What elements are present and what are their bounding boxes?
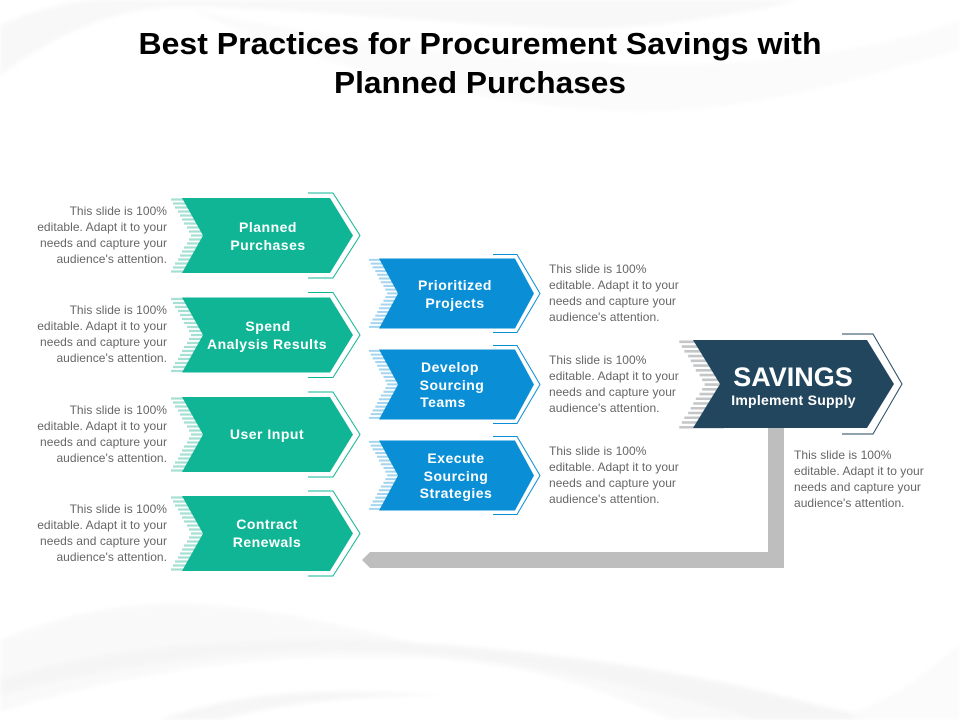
chevron: User Input: [171, 392, 360, 477]
chevron: Spend Analysis Results: [171, 292, 360, 378]
chevron: Execute Sourcing Strategies: [369, 436, 540, 514]
text block: middle 2: This slide is 100%: [549, 353, 647, 367]
chevron: Planned Purchases: Purchases: [230, 237, 306, 253]
text block: right: [794, 448, 924, 510]
chevron: Prioritized Projects: Projects: [425, 295, 485, 311]
chevron: Execute Sourcing Strategies: Strategies: [420, 485, 492, 501]
text block: left 1: [37, 204, 167, 266]
chevron: Develop Sourcing Teams: Sourcing: [420, 377, 484, 393]
title: Best Practices for Procurement Savings with: [138, 26, 822, 61]
arrow: feedback loop: [362, 428, 784, 568]
chevron: Spend Analysis Results: Analysis Results: [207, 336, 327, 352]
text block: left 4: [37, 502, 167, 564]
chevron: Savings Implement Supply: Implement Supply: [731, 392, 856, 408]
text block: middle 3: audience's attention.: [549, 492, 660, 506]
text block: right: needs and capture your: [794, 480, 921, 494]
text block: middle 2: editable. Adapt it to your: [549, 369, 679, 383]
chevron: Execute Sourcing Strategies: Sourcing: [424, 468, 488, 484]
text block: middle 1: audience's attention.: [549, 310, 660, 324]
chevron: Contract Renewals: Contract: [236, 516, 298, 532]
text block: left 2: [37, 303, 167, 365]
text block: left 1: editable. Adapt it to your: [37, 220, 167, 234]
chevron: Contract Renewals: Renewals: [233, 534, 301, 550]
text block: left 1: needs and capture your: [40, 236, 167, 250]
chevron: Develop Sourcing Teams: [369, 346, 540, 424]
text block: middle 3: [549, 444, 679, 506]
text block: left 2: This slide is 100%: [70, 303, 167, 317]
chevron: Contract Renewals: [171, 491, 360, 576]
text block: middle 3: editable. Adapt it to your: [549, 460, 679, 474]
text block: middle 2: audience's attention.: [549, 401, 660, 415]
chevron: Prioritized Projects: [369, 254, 540, 332]
text block: right: audience's attention.: [794, 496, 905, 510]
text block: left 4: editable. Adapt it to your: [37, 518, 167, 532]
text block: middle 2: [549, 353, 679, 415]
text block: left 3: audience's attention.: [56, 451, 167, 465]
chevron: Savings Implement Supply: [679, 334, 902, 434]
text block: left 2: audience's attention.: [56, 351, 167, 365]
text block: middle 2: needs and capture your: [549, 385, 676, 399]
chevron: Savings Implement Supply: SAVINGS: [733, 362, 853, 392]
text block: left 3: This slide is 100%: [70, 403, 167, 417]
chevron: Spend Analysis Results: Spend: [245, 318, 291, 334]
title: [138, 26, 822, 100]
text block: left 4: audience's attention.: [56, 550, 167, 564]
text block: middle 1: editable. Adapt it to your: [549, 278, 679, 292]
chevron: Develop Sourcing Teams: Teams: [420, 394, 466, 410]
text block: left 1: audience's attention.: [56, 252, 167, 266]
text block: left 3: needs and capture your: [40, 435, 167, 449]
text block: left 3: editable. Adapt it to your: [37, 419, 167, 433]
text block: middle 1: needs and capture your: [549, 294, 676, 308]
chevron: Prioritized Projects: Prioritized: [418, 277, 492, 293]
chevron: Execute Sourcing Strategies: Execute: [427, 450, 485, 466]
text block: left 4: This slide is 100%: [70, 502, 167, 516]
text block: middle 3: needs and capture your: [549, 476, 676, 490]
text block: right: editable. Adapt it to your: [794, 464, 924, 478]
chevron: Develop Sourcing Teams: Develop: [421, 359, 479, 375]
text block: middle 3: This slide is 100%: [549, 444, 647, 458]
text block: left 2: editable. Adapt it to your: [37, 319, 167, 333]
text block: left 3: [37, 403, 167, 465]
text block: right: This slide is 100%: [794, 448, 892, 462]
chevron: Planned Purchases: Planned: [239, 219, 297, 235]
title: Planned Purchases: [334, 65, 626, 100]
text block: left 1: This slide is 100%: [70, 204, 167, 218]
text block: middle 1: [549, 262, 679, 324]
text block: left 2: needs and capture your: [40, 335, 167, 349]
text block: left 4: needs and capture your: [40, 534, 167, 548]
chevron: User Input: User Input: [230, 426, 304, 442]
chevron: Planned Purchases: [171, 193, 360, 278]
text block: middle 1: This slide is 100%: [549, 262, 647, 276]
